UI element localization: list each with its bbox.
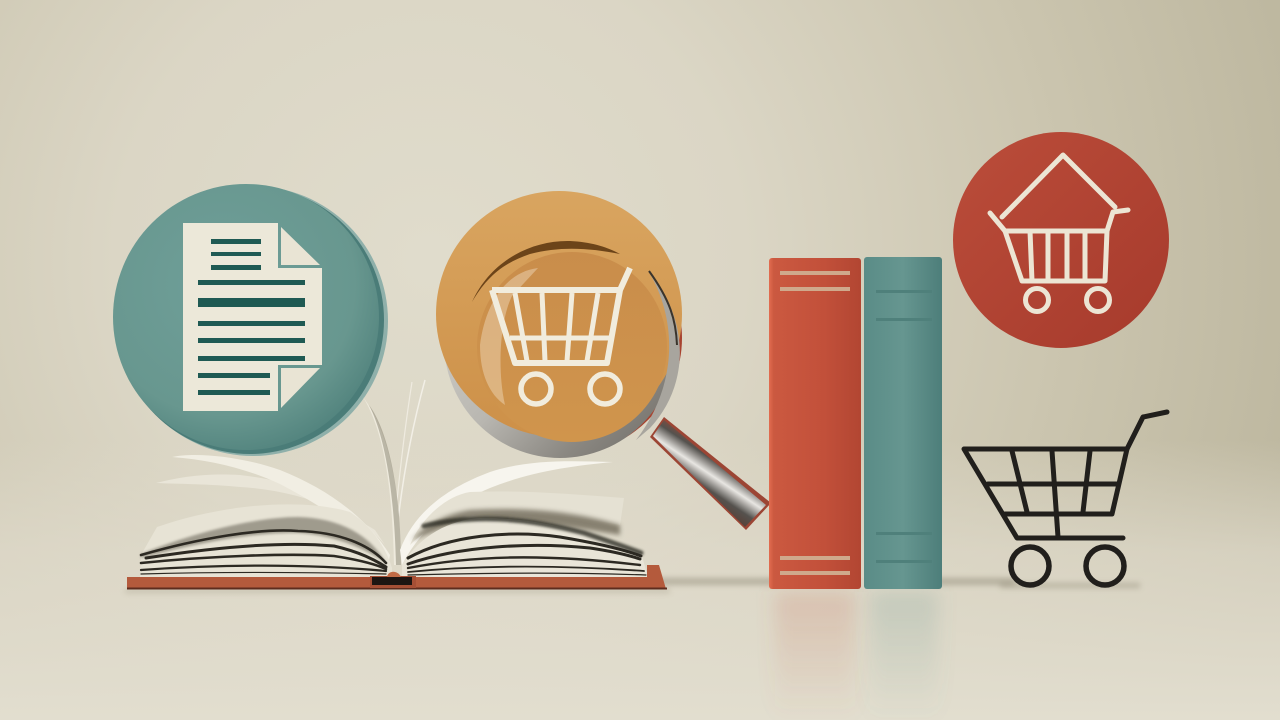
lens rim — [444, 226, 676, 458]
document page — [183, 223, 322, 411]
icon: teal document circle — [113, 184, 388, 456]
icon: red book — [769, 258, 861, 589]
glass lens — [477, 252, 667, 442]
icon: red cart circle — [953, 132, 1169, 348]
icon: teal book — [864, 257, 942, 589]
glass highlight — [480, 268, 538, 405]
book cover — [127, 565, 666, 589]
right page stack — [402, 518, 648, 577]
orange disc — [436, 191, 682, 437]
bronze arc — [472, 241, 620, 302]
icon: open book — [127, 380, 667, 590]
icon: black shopping cart — [964, 412, 1167, 585]
shopping cart — [492, 268, 630, 404]
flying thin pages — [398, 380, 425, 520]
left page stack — [140, 504, 392, 577]
icon: magnifying glass with cart — [436, 191, 771, 530]
handle — [650, 417, 771, 530]
right upper leaf — [410, 491, 624, 545]
